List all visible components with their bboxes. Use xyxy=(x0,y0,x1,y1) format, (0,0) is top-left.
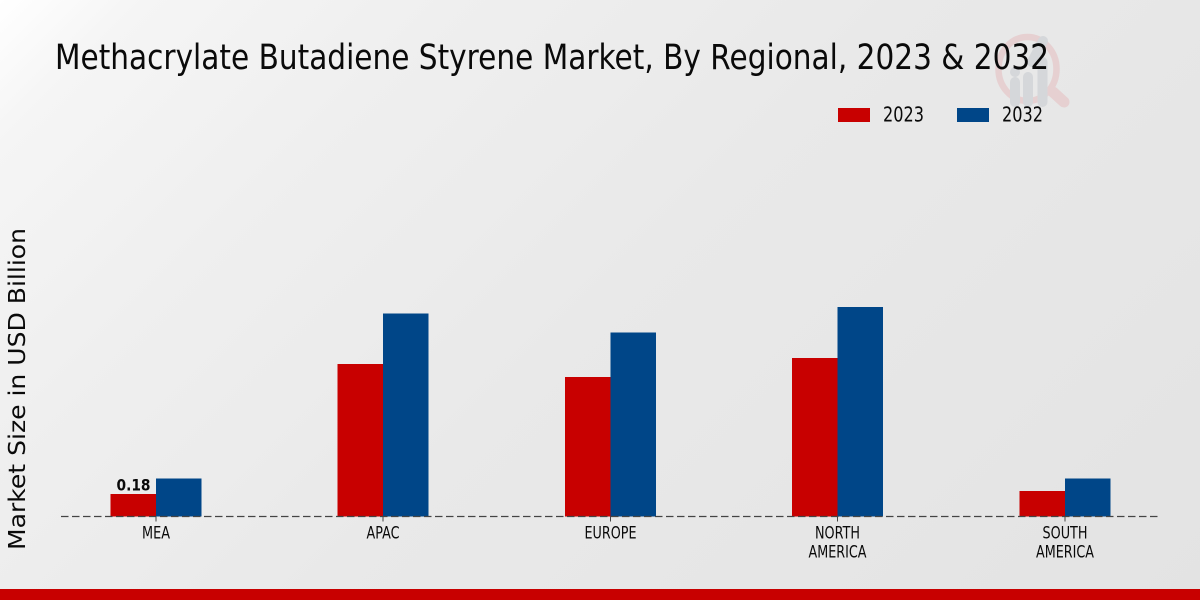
legend item: 2023: 2023 xyxy=(883,102,924,126)
bars: NORTH AMERICA xyxy=(792,307,883,516)
x-axis labels: SOUTH xyxy=(1042,524,1088,542)
x-axis labels: EUROPE xyxy=(584,524,636,542)
x-axis baseline xyxy=(61,516,1160,518)
bars: MEA xyxy=(110,478,202,516)
x-axis labels: MEA xyxy=(142,524,171,542)
x-axis labels: APAC xyxy=(366,524,400,542)
legend xyxy=(838,102,1043,126)
y-axis label: Market Size in USD Billion xyxy=(5,228,31,550)
data label: 0.18: 0.18 xyxy=(116,476,150,494)
bars: APAC xyxy=(338,314,428,516)
legend item: 2032 xyxy=(957,102,1043,126)
title: Methacrylate Butadiene Styrene Market, By Regional, 2023 & 2032 xyxy=(55,38,1049,78)
bars: EUROPE xyxy=(565,332,656,516)
x-axis labels: AMERICA xyxy=(808,542,867,562)
legend item: 2032: 2032 xyxy=(1002,102,1043,126)
icon: watermark logo xyxy=(998,37,1064,102)
x-axis labels: NORTH xyxy=(815,524,860,542)
bars: SOUTH AMERICA xyxy=(1020,478,1110,516)
legend item: 2023 xyxy=(838,102,924,126)
bar chart xyxy=(61,307,1160,562)
x-axis labels xyxy=(142,524,1095,562)
x-axis labels: AMERICA xyxy=(1036,542,1095,562)
footer bar xyxy=(0,589,1200,600)
